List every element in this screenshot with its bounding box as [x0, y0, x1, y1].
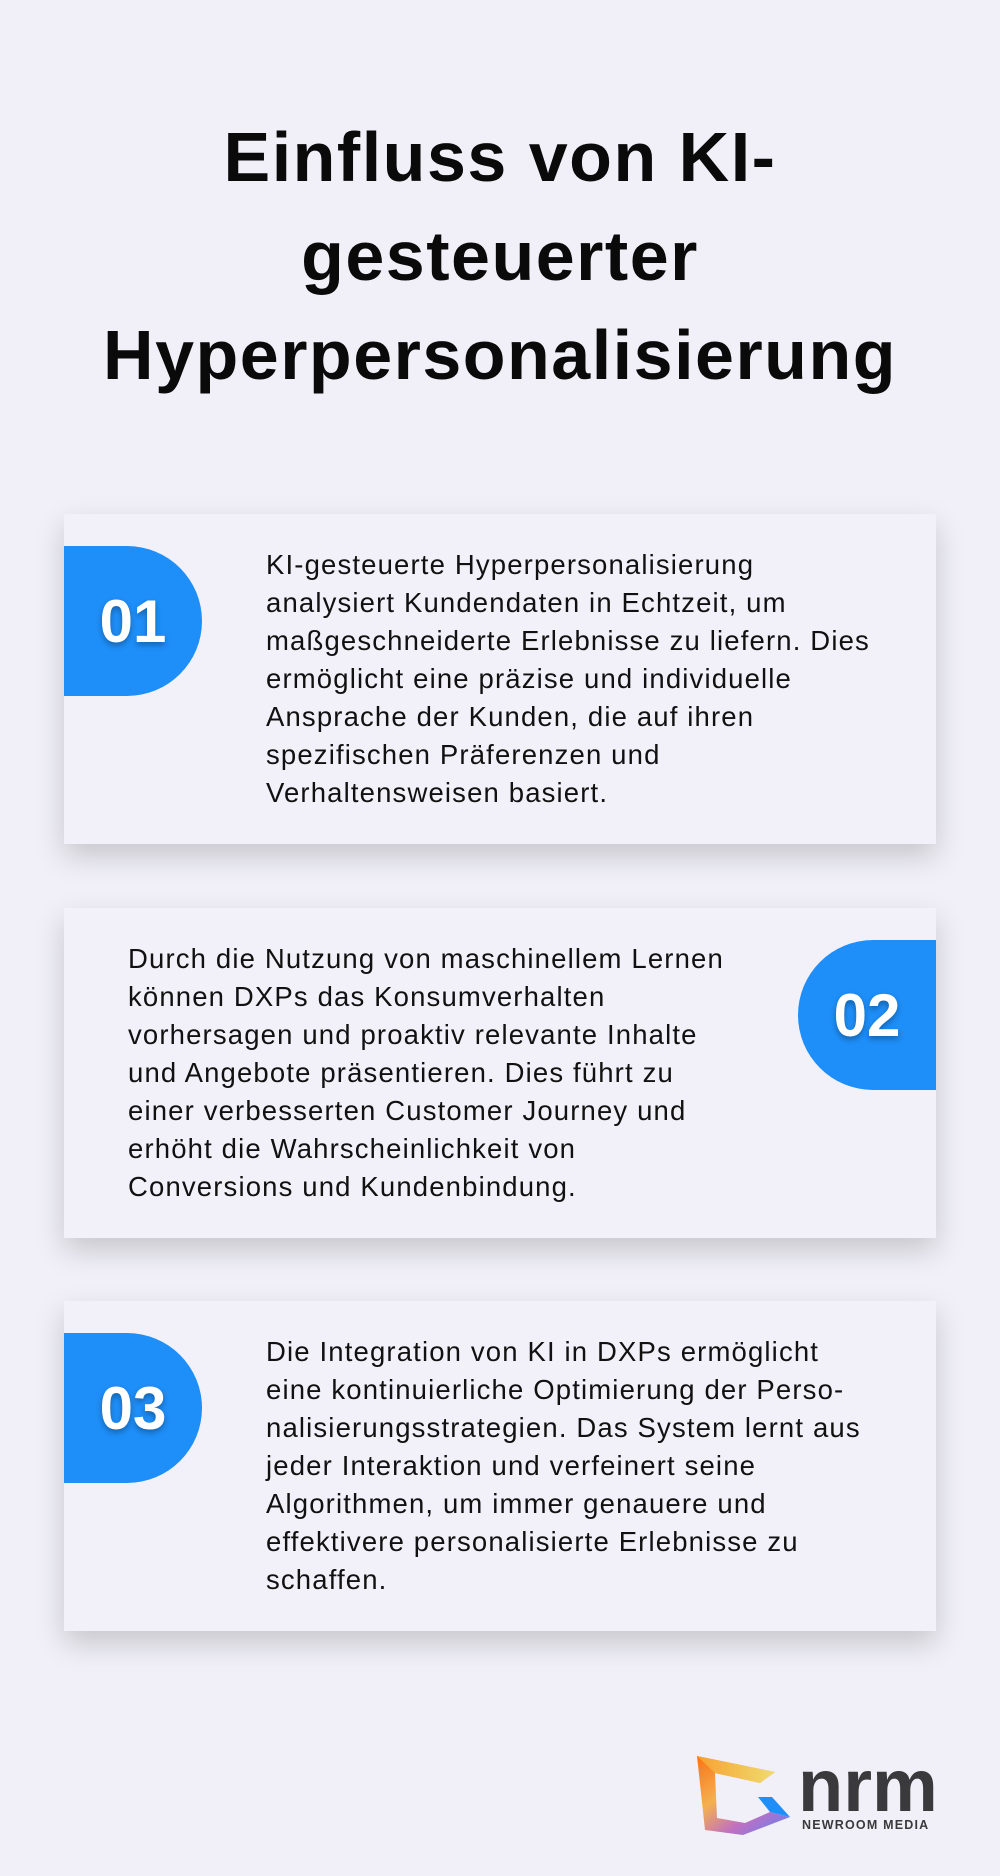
badge 02: [798, 940, 936, 1090]
panel: card 03: [64, 1301, 936, 1631]
text block 02: vorhersagen und proaktiv relevante Inhalte: [128, 1019, 698, 1050]
text block 02: [128, 943, 724, 1202]
panel: card 02: [64, 908, 936, 1238]
text block 01: analysiert Kundendaten in Echtzeit, um: [266, 587, 787, 618]
text block 01: Ansprache der Kunden, die auf ihren: [266, 701, 754, 732]
text block 03: schaffen.: [266, 1564, 387, 1595]
badge 02: 02: [834, 982, 900, 1048]
text block 02: Durch die Nutzung von maschinellem Lernen: [128, 943, 724, 974]
text block 03: eine kontinuierliche Optimierung der Perso-: [266, 1374, 844, 1405]
badge 01: 01: [100, 588, 166, 654]
text block 03: effektivere personalisierte Erlebnisse zu: [266, 1526, 799, 1557]
title: Hyperpersonalisierung: [103, 316, 897, 394]
text block 01: spezifischen Präferenzen und: [266, 739, 661, 770]
text block 03: [265, 1336, 861, 1595]
icon: logo mark: [697, 1756, 790, 1835]
text block 03: jeder Interaktion und verfeinert seine: [266, 1450, 756, 1481]
text block 02: Conversions und Kundenbindung.: [128, 1171, 577, 1202]
text block 01: Verhaltensweisen basiert.: [266, 777, 608, 808]
text block 02: und Angebote präsentieren. Dies führt zu: [128, 1057, 674, 1088]
logo wordmark: nrm: [798, 1744, 938, 1827]
logo: [697, 1744, 938, 1835]
text block 02: einer verbesserten Customer Journey und: [128, 1095, 686, 1126]
text block 02: erhöht die Wahrscheinlichkeit von: [128, 1133, 576, 1164]
badge 03: 03: [100, 1374, 166, 1442]
text block 02: können DXPs das Konsumverhalten: [128, 981, 605, 1012]
title: [103, 118, 897, 394]
text block 01: KI-gesteuerte Hyperpersonalisierung: [266, 549, 754, 580]
text block 03: Die Integration von KI in DXPs ermöglicht: [266, 1336, 819, 1367]
text block 01: maßgeschneiderte Erlebnisse zu liefern. Dies: [266, 625, 870, 656]
text block 03: nalisierungsstrategien. Das System lernt aus: [266, 1412, 861, 1443]
logo subtitle: NEWROOM MEDIA: [802, 1818, 929, 1832]
badge 01: [64, 546, 202, 696]
text block 03: Algorithmen, um immer genauere und: [266, 1488, 767, 1519]
text block 01: [266, 549, 870, 808]
text block 01: ermöglicht eine präzise und individuelle: [266, 663, 792, 694]
panel: card 01: [64, 514, 936, 844]
title: Einfluss von KI-: [224, 118, 776, 196]
title: gesteuerter: [301, 217, 699, 295]
badge 03: [64, 1333, 202, 1483]
